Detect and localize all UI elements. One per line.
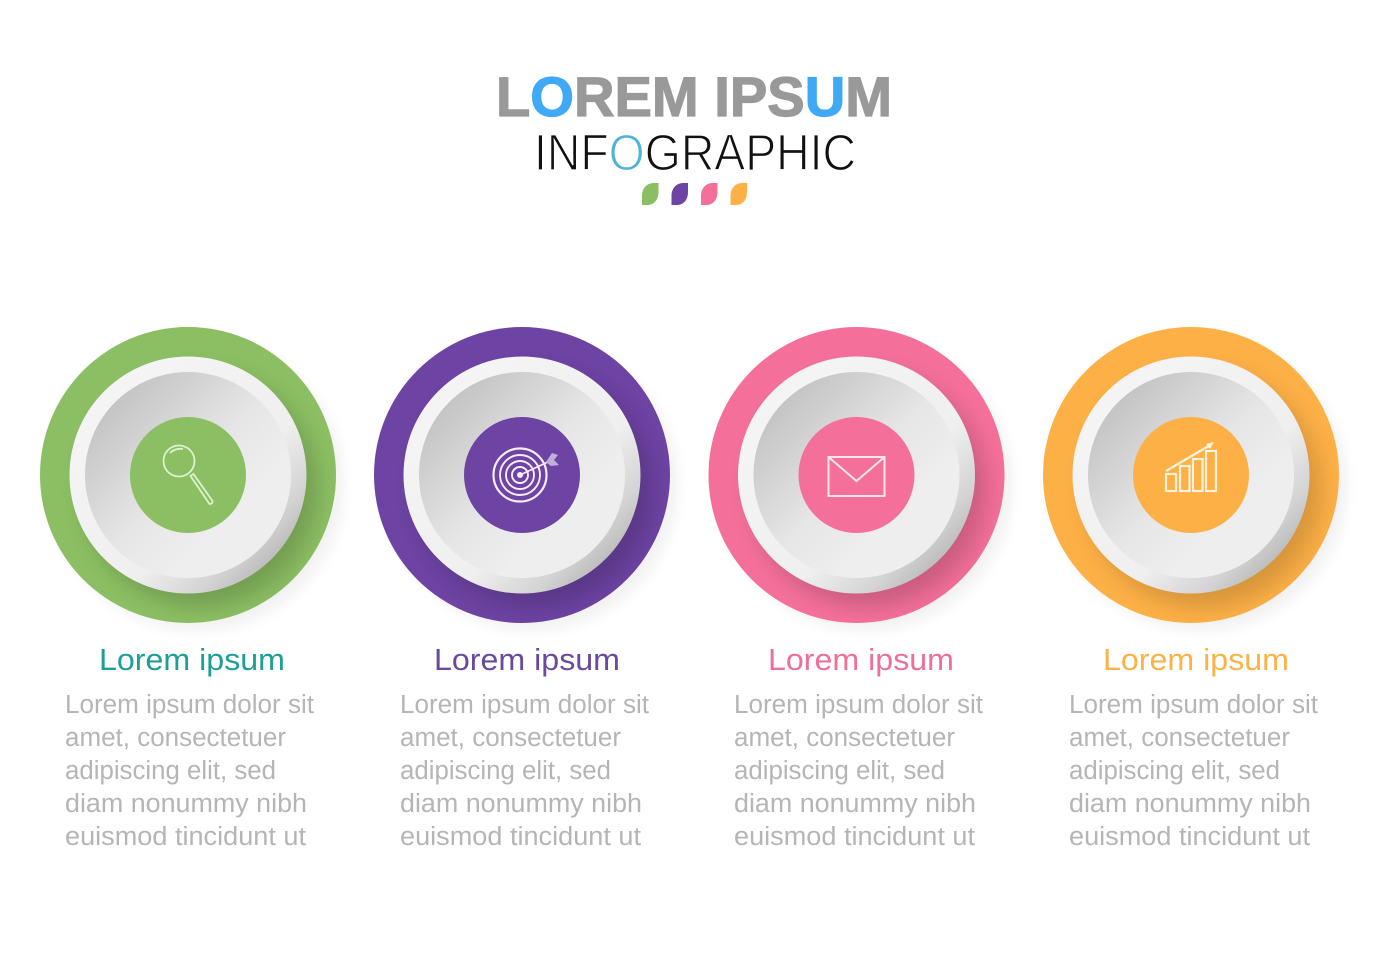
leaf markers — [642, 183, 747, 205]
panel: step 1 green — [40, 327, 344, 851]
body text: diam nonummy nibh — [1069, 790, 1311, 818]
heading: Lorem ipsum — [1103, 642, 1289, 677]
circle badge: orange — [1043, 327, 1347, 631]
panel: step 2 purple — [374, 327, 678, 851]
body text: amet, consectetuer — [734, 724, 956, 752]
icon: magnifying glass — [164, 446, 213, 504]
body text — [734, 691, 983, 851]
body text: adipiscing elit, sed — [1069, 757, 1280, 785]
circle badge: green — [40, 327, 344, 631]
body text — [1069, 691, 1318, 851]
body text: diam nonummy nibh — [65, 790, 307, 818]
body text: Lorem ipsum dolor sit — [65, 691, 314, 719]
heading: Lorem ipsum — [99, 642, 285, 677]
body text: euismod tincidunt ut — [734, 823, 975, 851]
circle badge: pink — [708, 327, 1012, 631]
body text: Lorem ipsum dolor sit — [1069, 691, 1318, 719]
body text — [65, 691, 314, 851]
body text: amet, consectetuer — [65, 724, 287, 752]
body text: euismod tincidunt ut — [65, 823, 306, 851]
body text: Lorem ipsum dolor sit — [400, 691, 649, 719]
icon: rising bar chart — [1166, 442, 1216, 491]
body text: amet, consectetuer — [400, 724, 622, 752]
heading: Lorem ipsum — [768, 642, 954, 677]
panel: step 4 orange — [1043, 327, 1347, 851]
body text: adipiscing elit, sed — [734, 757, 945, 785]
body text: amet, consectetuer — [1069, 724, 1291, 752]
heading: Lorem ipsum — [434, 642, 620, 677]
subtitle: INFOGRAPHIC: INFOGRAPHIC — [534, 124, 856, 181]
icon: target with arrow — [494, 448, 559, 502]
body text: Lorem ipsum dolor sit — [734, 691, 983, 719]
title — [496, 65, 892, 181]
body text: diam nonummy nibh — [734, 790, 976, 818]
circle badge: purple — [374, 327, 678, 631]
body text: diam nonummy nibh — [400, 790, 642, 818]
body text: adipiscing elit, sed — [400, 757, 611, 785]
body text — [400, 691, 649, 851]
body text: adipiscing elit, sed — [65, 757, 276, 785]
title line: LOREM IPSUM: LOREM IPSUM — [496, 65, 892, 128]
body text: euismod tincidunt ut — [400, 823, 641, 851]
panel: step 3 pink — [708, 327, 1012, 851]
body text: euismod tincidunt ut — [1069, 823, 1310, 851]
icon: envelope — [828, 457, 884, 496]
